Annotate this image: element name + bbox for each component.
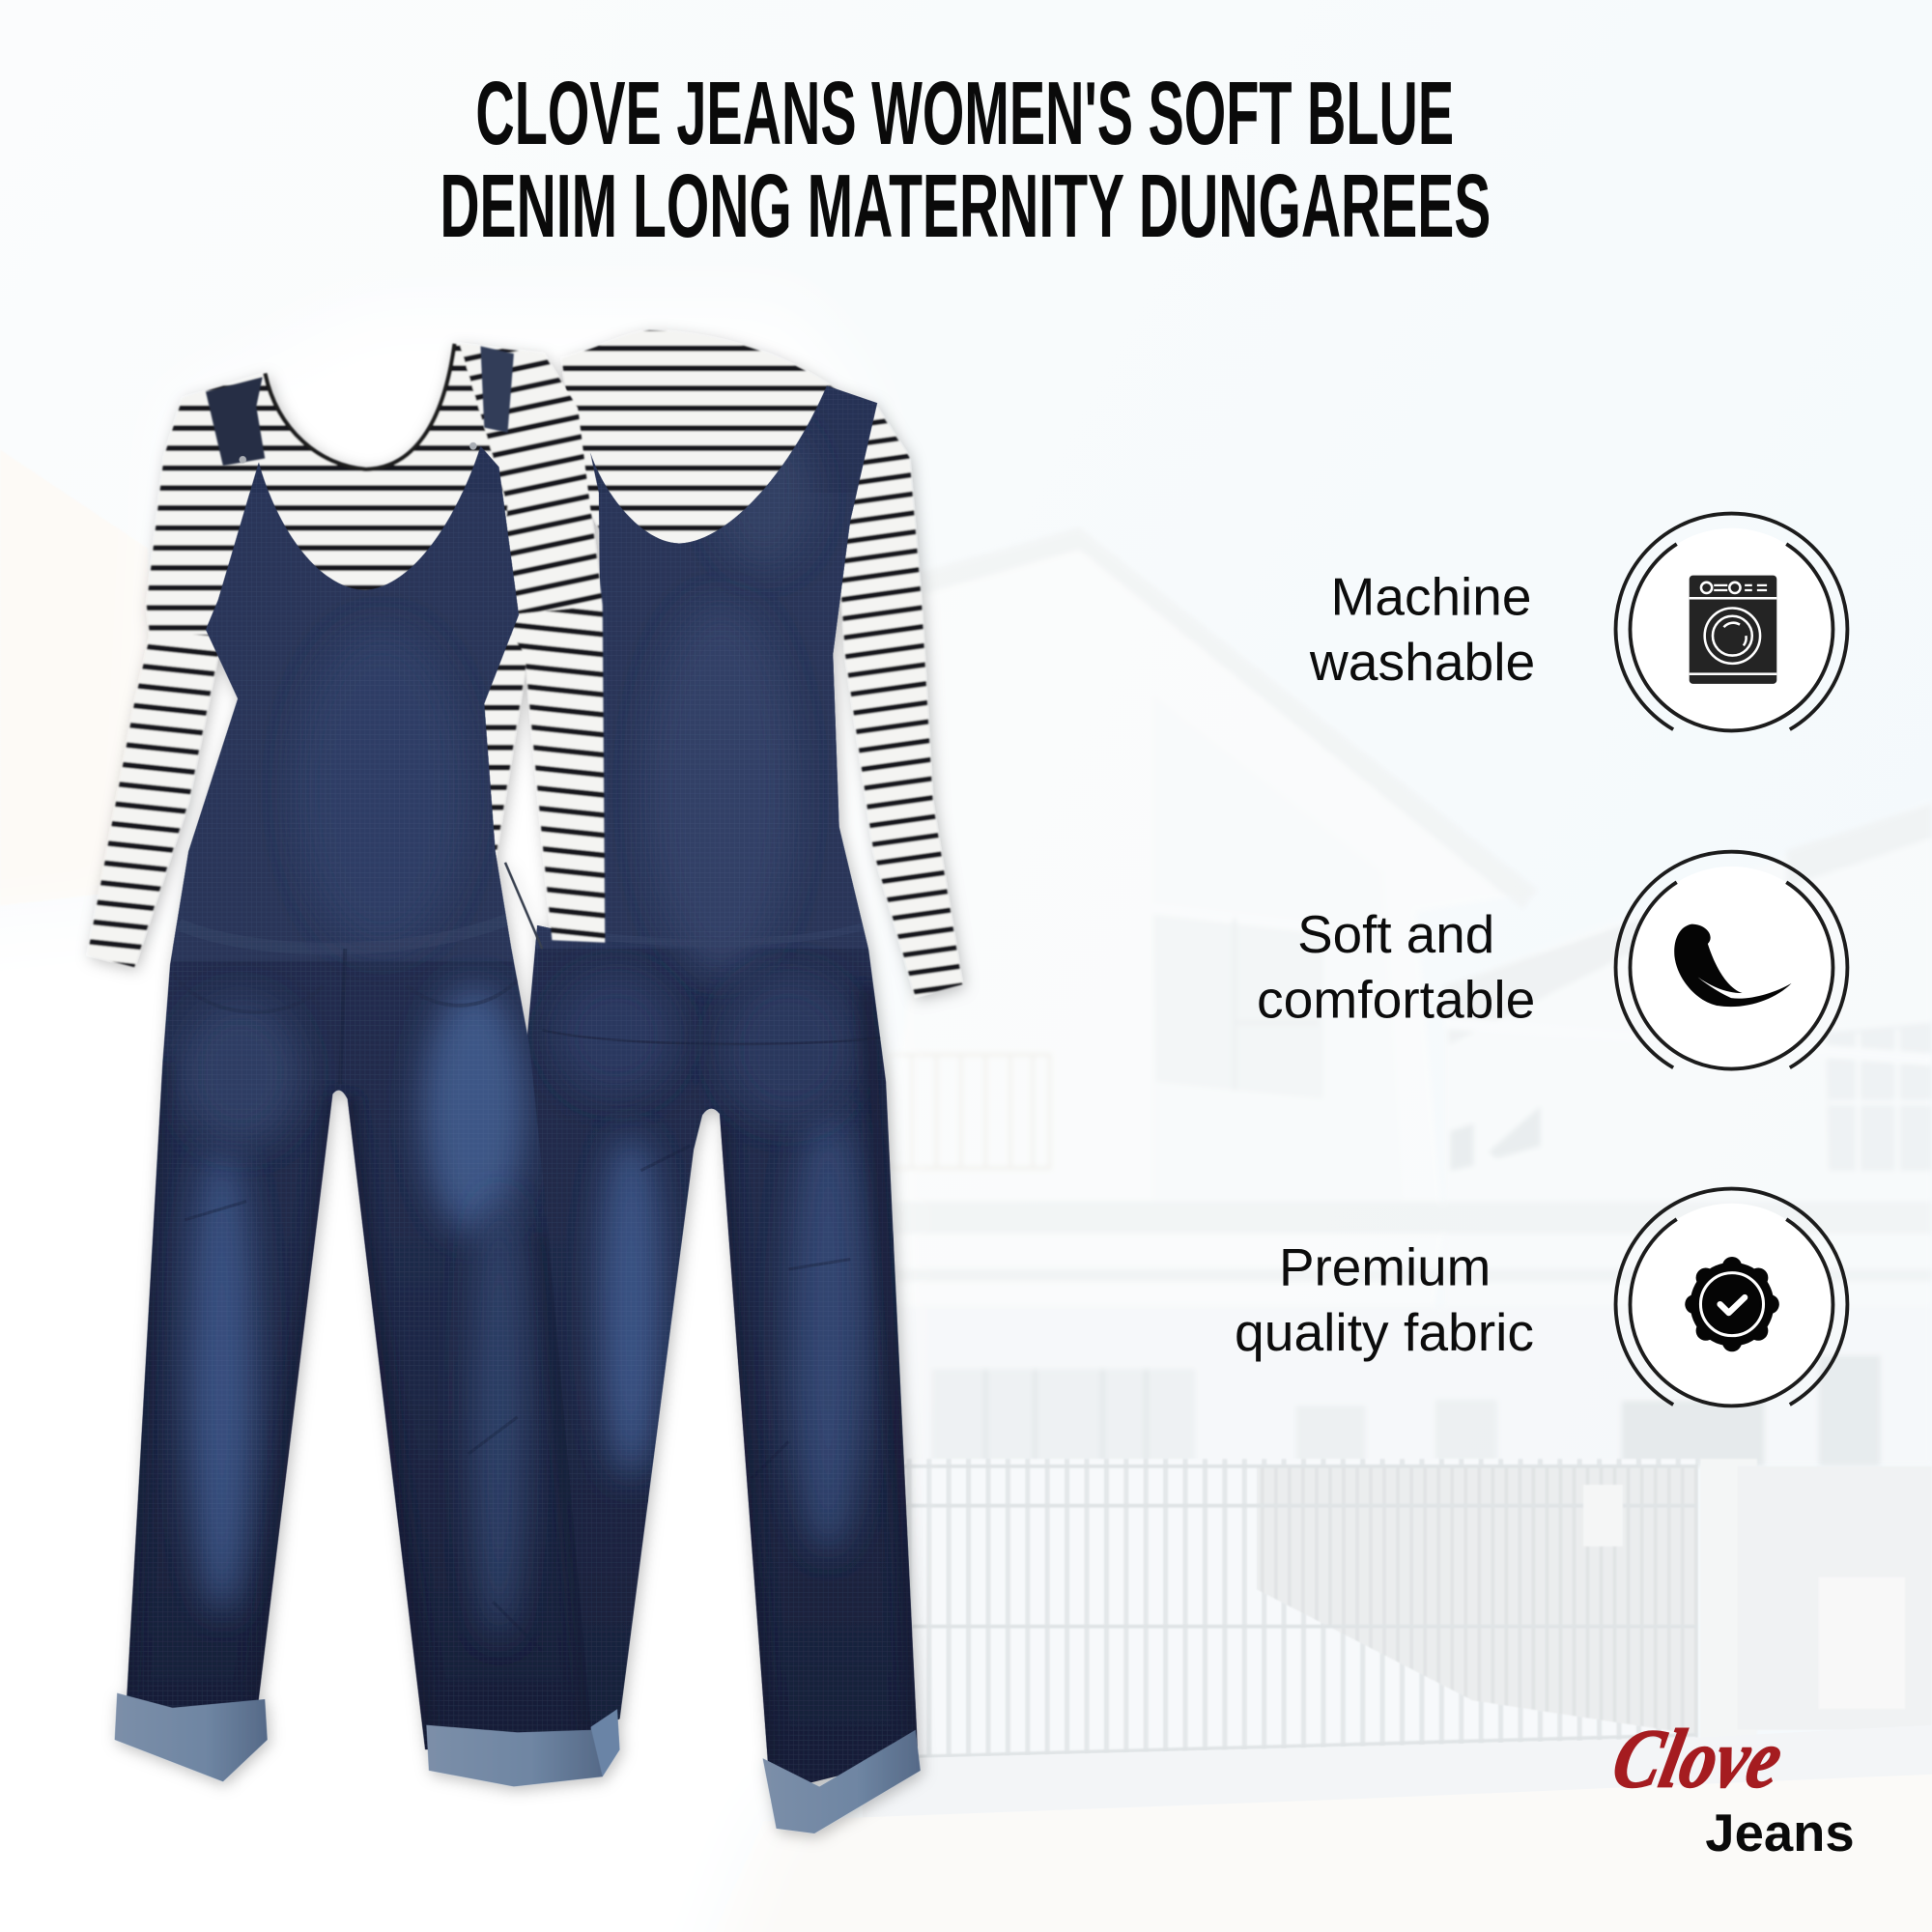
brand logo: Clove xyxy=(1605,1712,1790,1804)
label: premium quality fabric: Premium xyxy=(1279,1236,1491,1296)
house illustration layer xyxy=(890,527,1932,1466)
right building xyxy=(1444,801,1932,1466)
label: soft and comfortable xyxy=(1257,904,1535,1030)
label: soft and comfortable: comfortable xyxy=(1257,970,1535,1030)
gable wall with window xyxy=(1153,695,1403,1208)
fence xyxy=(903,1459,1698,1757)
boundary wall and sign xyxy=(1700,1459,1932,1754)
product photo: two views of denim dungarees xyxy=(88,330,962,1833)
side tie xyxy=(505,863,542,949)
seal glyph xyxy=(1685,1257,1779,1351)
label: premium quality fabric: quality fabric xyxy=(1235,1302,1534,1362)
right figure denim xyxy=(518,370,936,1811)
left figure (front view) xyxy=(88,344,605,1786)
ground-floor windows xyxy=(931,1355,1880,1466)
icon badge: quality seal xyxy=(1616,1189,1847,1406)
washing machine glyph xyxy=(1690,576,1776,684)
label: premium quality fabric xyxy=(1235,1236,1534,1362)
label: machine washable: washable xyxy=(1309,632,1535,692)
balcony railing xyxy=(890,1055,1050,1168)
right figure (back view) xyxy=(518,330,962,1833)
road xyxy=(863,1725,1932,1824)
striped top, front view xyxy=(88,344,605,967)
striped top, back view xyxy=(562,330,962,997)
horizontal wall bands xyxy=(894,1202,1932,1466)
ground xyxy=(715,1775,1932,1932)
right strap, front xyxy=(480,346,514,433)
white product backdrop xyxy=(0,308,881,1932)
strap buckles xyxy=(239,442,477,464)
feather glyph xyxy=(1674,924,1792,1007)
right figure cuff: left leg xyxy=(579,1709,620,1776)
brand logo xyxy=(1605,1712,1855,1862)
icon badge: washing machine xyxy=(1616,514,1847,731)
main house wall xyxy=(894,549,1513,1466)
left building peach wall xyxy=(0,450,160,906)
feature: machine washable xyxy=(1309,514,1847,731)
left cuff xyxy=(115,1693,268,1781)
main house roof fascia xyxy=(922,527,1538,909)
label: machine washable xyxy=(1309,566,1535,692)
icon badge: feather xyxy=(1616,852,1847,1069)
middle cuff xyxy=(426,1725,603,1786)
feature: soft and comfortable xyxy=(1257,852,1847,1069)
left strap, front xyxy=(206,377,265,466)
left figure denim xyxy=(111,443,604,1762)
title xyxy=(440,63,1491,256)
brand logo: Jeans xyxy=(1705,1803,1855,1862)
label: machine washable: Machine xyxy=(1331,566,1531,626)
feature: premium quality fabric xyxy=(1235,1189,1847,1406)
right figure cuff: right leg xyxy=(763,1730,921,1833)
label: soft and comfortable: Soft and xyxy=(1297,904,1494,964)
